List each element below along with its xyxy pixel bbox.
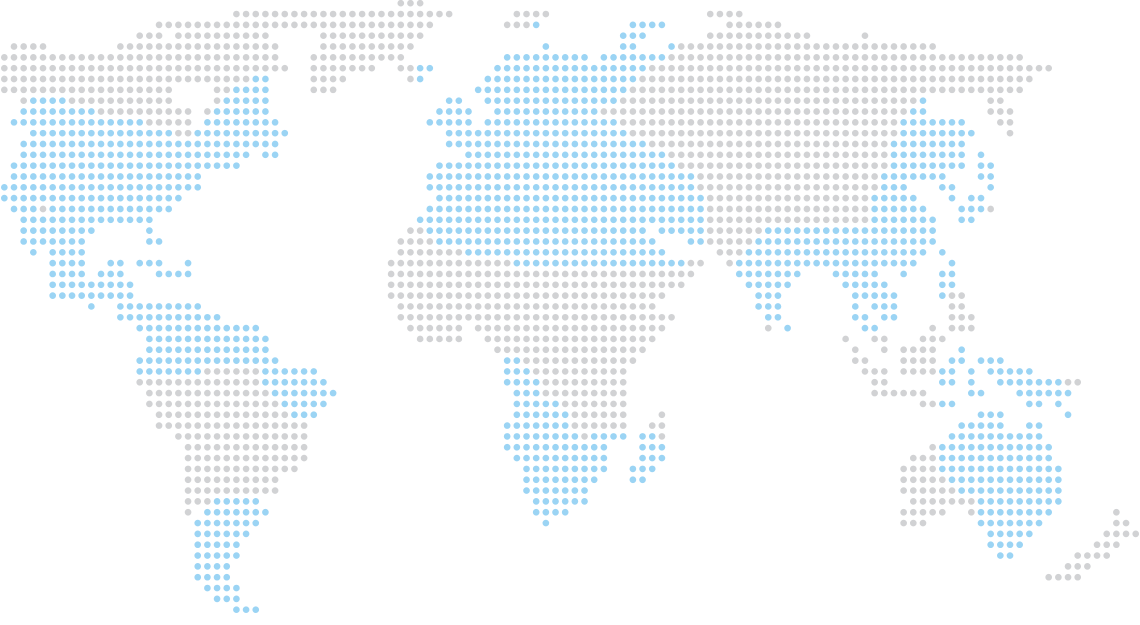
blue dots: Europe, North Africa and Middle East bbox=[420, 25, 702, 263]
gray dots: Asia bbox=[507, 14, 1050, 263]
blue dots: North and Central America bbox=[4, 79, 286, 306]
blue dots: South and East Asia bbox=[739, 101, 992, 328]
blue dots: Indonesia and Pacific islands bbox=[942, 350, 1069, 415]
blue dots: South America bbox=[120, 317, 334, 610]
gray dots: Southeast Asia bbox=[768, 296, 1079, 404]
gray dots: New Zealand bbox=[1049, 512, 1137, 577]
blue dots: Australia bbox=[942, 415, 1059, 556]
gray dots: South America bbox=[140, 371, 305, 512]
gray dots: North America and Greenland bbox=[4, 3, 450, 209]
blue dots: Southern Africa and Madagascar bbox=[507, 361, 663, 523]
gray dots: Western Australia bbox=[904, 447, 972, 523]
gray dots: Africa bbox=[391, 231, 702, 436]
